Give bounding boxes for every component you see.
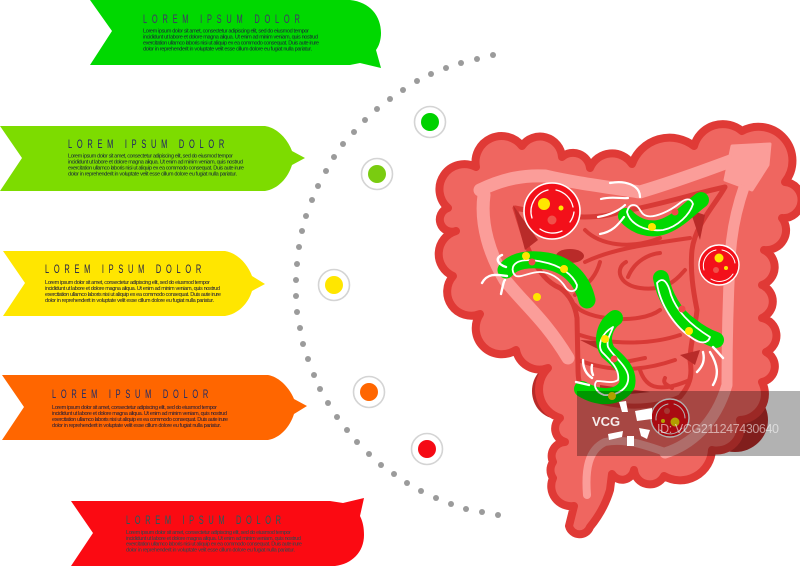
red sphere: large [524,183,580,239]
intestine fold lines [575,230,690,388]
marker: yellow [318,270,350,300]
ribbon: green [90,0,381,68]
red sphere: right [699,245,739,285]
bacterium: left [482,252,587,301]
small intestine mass [515,187,725,406]
title: lime ribbon: LOREM IPSUM DOLOR [68,138,224,152]
title: yellow ribbon: LOREM IPSUM DOLOR [45,263,201,277]
bacterium: right [657,278,723,385]
text block: yellow ribbon: dolor in reprehenderit in voluptate velit esse cillum dolore eu fugiat nulla pariatur. [45,298,214,304]
watermark pinwheel icon [608,401,652,446]
text block: lime ribbon [68,154,244,178]
pale colon channel [480,144,770,495]
watermark id: ID: VCG211247430640 [657,422,779,436]
text block: yellow ribbon [45,280,221,304]
ribbon: lime [0,126,305,191]
colon wall and surface [439,124,800,534]
text block: green ribbon [143,28,319,52]
text block: lime ribbon: incididunt ut labore et dolore magna aliqua. Ut enim ad minim veniam, quis nostrud [68,160,243,166]
text block: green ribbon: Lorem ipsum dolor sit amet, consectetur adipiscing elit, sed do eiusmod tempor [143,28,309,34]
text block: orange ribbon: dolor in reprehenderit in voluptate velit esse cillum dolore eu fugiat nulla pariatur. [52,423,221,429]
marker: lime [362,158,392,190]
watermark band [577,391,800,456]
dotted arc [293,52,501,518]
marker: orange [354,376,384,408]
title: green ribbon: LOREM IPSUM DOLOR [143,13,300,27]
marker: green [414,106,446,138]
bacterium: bottom [576,318,628,400]
watermark logo: VCG [592,414,620,429]
text block: red ribbon: incididunt ut labore et dolore magna aliqua. Ut enim ad minim veniam, quis nostrud [126,536,301,542]
red sphere: bottom [651,399,689,437]
text block: red ribbon: exercitation ullamco laboris nisi ut aliquip ex ea commodo consequat. Duis aute irure [126,542,302,548]
text block: yellow ribbon: Lorem ipsum dolor sit amet, consectetur adipiscing elit, sed do eiusmod tempor [45,280,210,286]
text block: orange ribbon: Lorem ipsum dolor sit amet, consectetur adipiscing elit, sed do eiusmod tempor [52,405,217,411]
text block: green ribbon: exercitation ullamco laboris nisi ut aliquip ex ea commodo consequat. Duis aute irure [143,40,319,46]
marker: red [412,434,442,464]
text block: red ribbon: Lorem ipsum dolor sit amet, consectetur adipiscing elit, sed do eiusmod tempor [126,530,291,536]
text block: green ribbon: dolor in reprehenderit in voluptate velit esse cillum dolore eu fugiat nulla pariatur. [143,46,312,52]
title: red ribbon: LOREM IPSUM DOLOR [126,514,281,528]
text block: yellow ribbon: incididunt ut labore et dolore magna aliqua. Ut enim ad minim veniam, quis nostrud [45,286,220,292]
dark intestine folds [513,205,705,397]
dark lower shadow lobes [532,363,768,452]
text block: lime ribbon: dolor in reprehenderit in voluptate velit esse cillum dolore eu fugiat nulla pariatur. [68,172,237,178]
ribbon: orange [2,375,307,440]
text block: lime ribbon: Lorem ipsum dolor sit amet, consectetur adipiscing elit, sed do eiusmod tempor [68,154,233,160]
title: orange ribbon: LOREM IPSUM DOLOR [52,388,208,402]
bacterium: top right [598,182,701,234]
text block: orange ribbon: exercitation ullamco laboris nisi ut aliquip ex ea commodo consequat. Duis aute irure [52,417,228,423]
text block: lime ribbon: exercitation ullamco laboris nisi ut aliquip ex ea commodo consequat. Duis aute irure [68,166,244,172]
text block: orange ribbon [52,405,228,429]
text block: red ribbon [126,530,302,554]
text block: orange ribbon: incididunt ut labore et dolore magna aliqua. Ut enim ad minim veniam, quis nostrud [52,411,227,417]
text block: red ribbon: dolor in reprehenderit in voluptate velit esse cillum dolore eu fugiat nulla pariatur. [126,548,295,554]
text block: green ribbon: incididunt ut labore et dolore magna aliqua. Ut enim ad minim veniam, quis nostrud [143,34,318,40]
ribbon: yellow [3,251,265,316]
intestine illustration [439,124,800,534]
ribbon: red [71,498,364,566]
text block: yellow ribbon: exercitation ullamco laboris nisi ut aliquip ex ea commodo consequat. Duis aute irure [45,292,221,298]
